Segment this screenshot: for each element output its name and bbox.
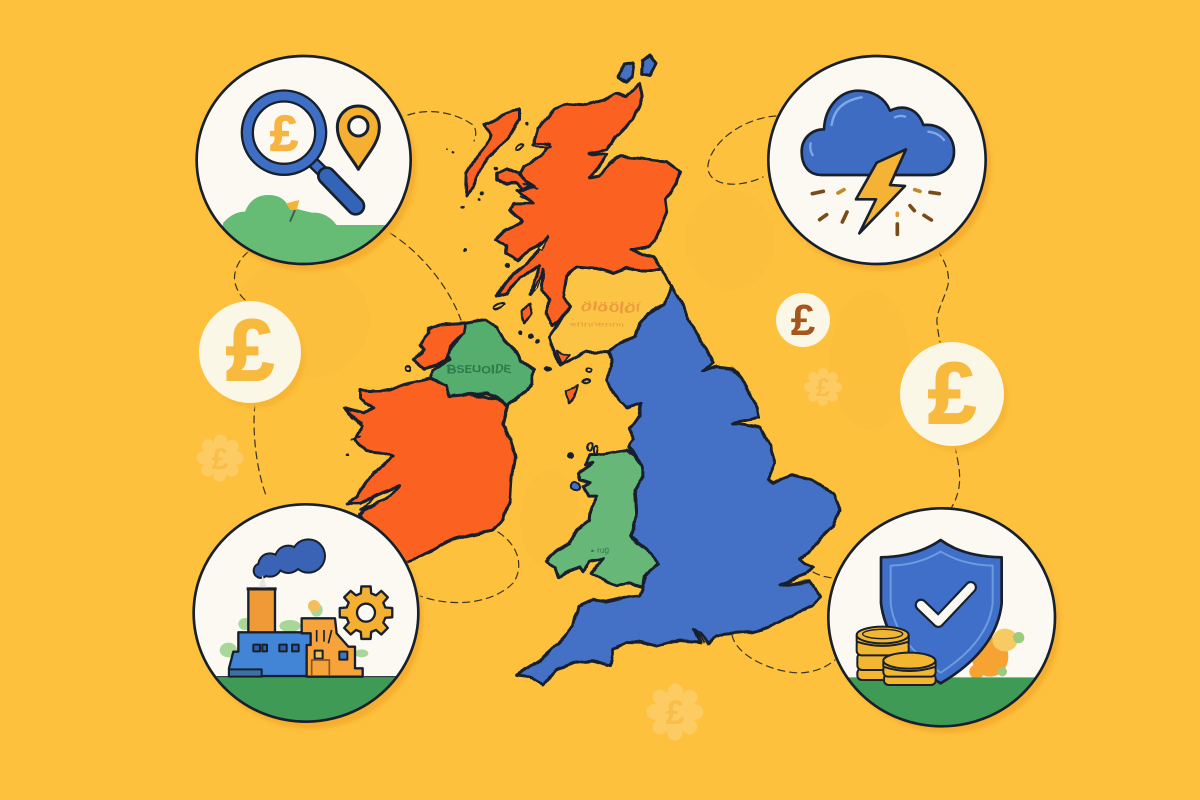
islands and dots <box>343 365 807 642</box>
magnifier handle <box>313 163 356 206</box>
map of British Isles <box>343 55 840 685</box>
pound glyph: £ <box>791 296 816 345</box>
small orange islet <box>556 350 570 364</box>
panel: factory and gear <box>180 504 433 733</box>
faint coin left: £ <box>212 443 229 476</box>
coin stack back <box>857 627 909 680</box>
circle outline <box>828 508 1055 726</box>
garbled label: Northern Ireland: BSEUOIDE <box>447 363 512 375</box>
coin shadow <box>906 349 1008 451</box>
cloud highlight <box>810 97 944 155</box>
faint coin right <box>809 373 837 402</box>
garbled label: Wales: • rug <box>591 544 609 554</box>
flag stem <box>290 210 295 222</box>
circle outline <box>194 504 418 722</box>
ground <box>216 676 395 720</box>
orange windows <box>315 651 323 659</box>
building plinth <box>229 669 262 677</box>
check mark <box>921 587 971 622</box>
circle shadow <box>199 511 423 729</box>
pound coin right <box>900 342 1008 451</box>
Skye <box>497 168 530 188</box>
spark dashes <box>812 190 939 234</box>
blue building <box>229 632 311 676</box>
circle shadow <box>773 63 991 271</box>
dashed connectors <box>234 112 960 673</box>
circle base <box>768 56 986 264</box>
infographic scene <box>192 54 1060 740</box>
Outer Hebrides <box>466 108 520 195</box>
door upper <box>317 630 332 643</box>
faint coin bottom: £ <box>666 694 685 732</box>
circle base <box>828 508 1055 726</box>
gear <box>340 586 392 639</box>
circle base <box>197 56 411 264</box>
pound coin small <box>776 293 830 347</box>
smoke <box>253 538 326 579</box>
orange puff <box>308 600 320 612</box>
England <box>517 287 840 685</box>
circle base <box>194 504 418 722</box>
shield inner line <box>891 552 993 673</box>
small flag <box>286 200 299 210</box>
Wales <box>547 450 658 587</box>
ground line <box>217 675 397 678</box>
Arran <box>522 305 532 323</box>
pound in lens: £ <box>270 106 298 162</box>
Donegal <box>413 323 465 368</box>
Isle of Man <box>567 385 578 403</box>
Ireland and Wales, England (southern map coordinates) <box>343 267 840 685</box>
circle outline <box>197 56 411 264</box>
location pin <box>337 106 379 169</box>
ground <box>848 677 1035 725</box>
faint coin right: £ <box>816 374 830 402</box>
shield <box>881 540 1002 683</box>
pale foliage <box>220 603 368 657</box>
pound glyph: £ <box>928 346 976 442</box>
Northern Ireland <box>430 320 535 405</box>
steam wisp <box>259 575 267 587</box>
pound coin left <box>199 301 305 408</box>
small islands <box>493 143 650 310</box>
garbled sub label: South Scotland: ennnennn <box>570 322 626 329</box>
panel: magnifier and pin <box>197 56 416 273</box>
Ireland south-west inlet <box>360 487 400 510</box>
orange foliage <box>969 629 1024 679</box>
circle shadow <box>834 515 1060 733</box>
coin stack front <box>883 653 936 685</box>
faint coin left <box>203 441 237 476</box>
Scotland <box>495 83 680 325</box>
Republic of Ireland <box>345 378 515 562</box>
Orkney <box>618 63 633 82</box>
windows <box>253 645 299 651</box>
cloud <box>802 91 954 175</box>
green ground with bushes <box>222 195 386 263</box>
Scotland and islands (northern map coordinates) <box>445 55 680 344</box>
door <box>312 660 329 676</box>
panel: shield and coins <box>820 508 1073 740</box>
panel: storm cloud <box>768 56 991 271</box>
circle shadow <box>202 63 416 271</box>
chimney <box>247 587 277 633</box>
South Scotland border region <box>550 267 672 365</box>
orange building <box>302 618 363 677</box>
faint coin bottom <box>654 691 696 733</box>
faint background washes <box>230 190 910 570</box>
coin shadow <box>205 308 305 408</box>
garbled label: South Scotland: ölöölöí <box>581 299 642 315</box>
pound glyph: £ <box>226 303 274 399</box>
lightning bolt <box>856 149 906 233</box>
magnifier ring <box>247 96 321 169</box>
Shetland <box>643 55 656 75</box>
